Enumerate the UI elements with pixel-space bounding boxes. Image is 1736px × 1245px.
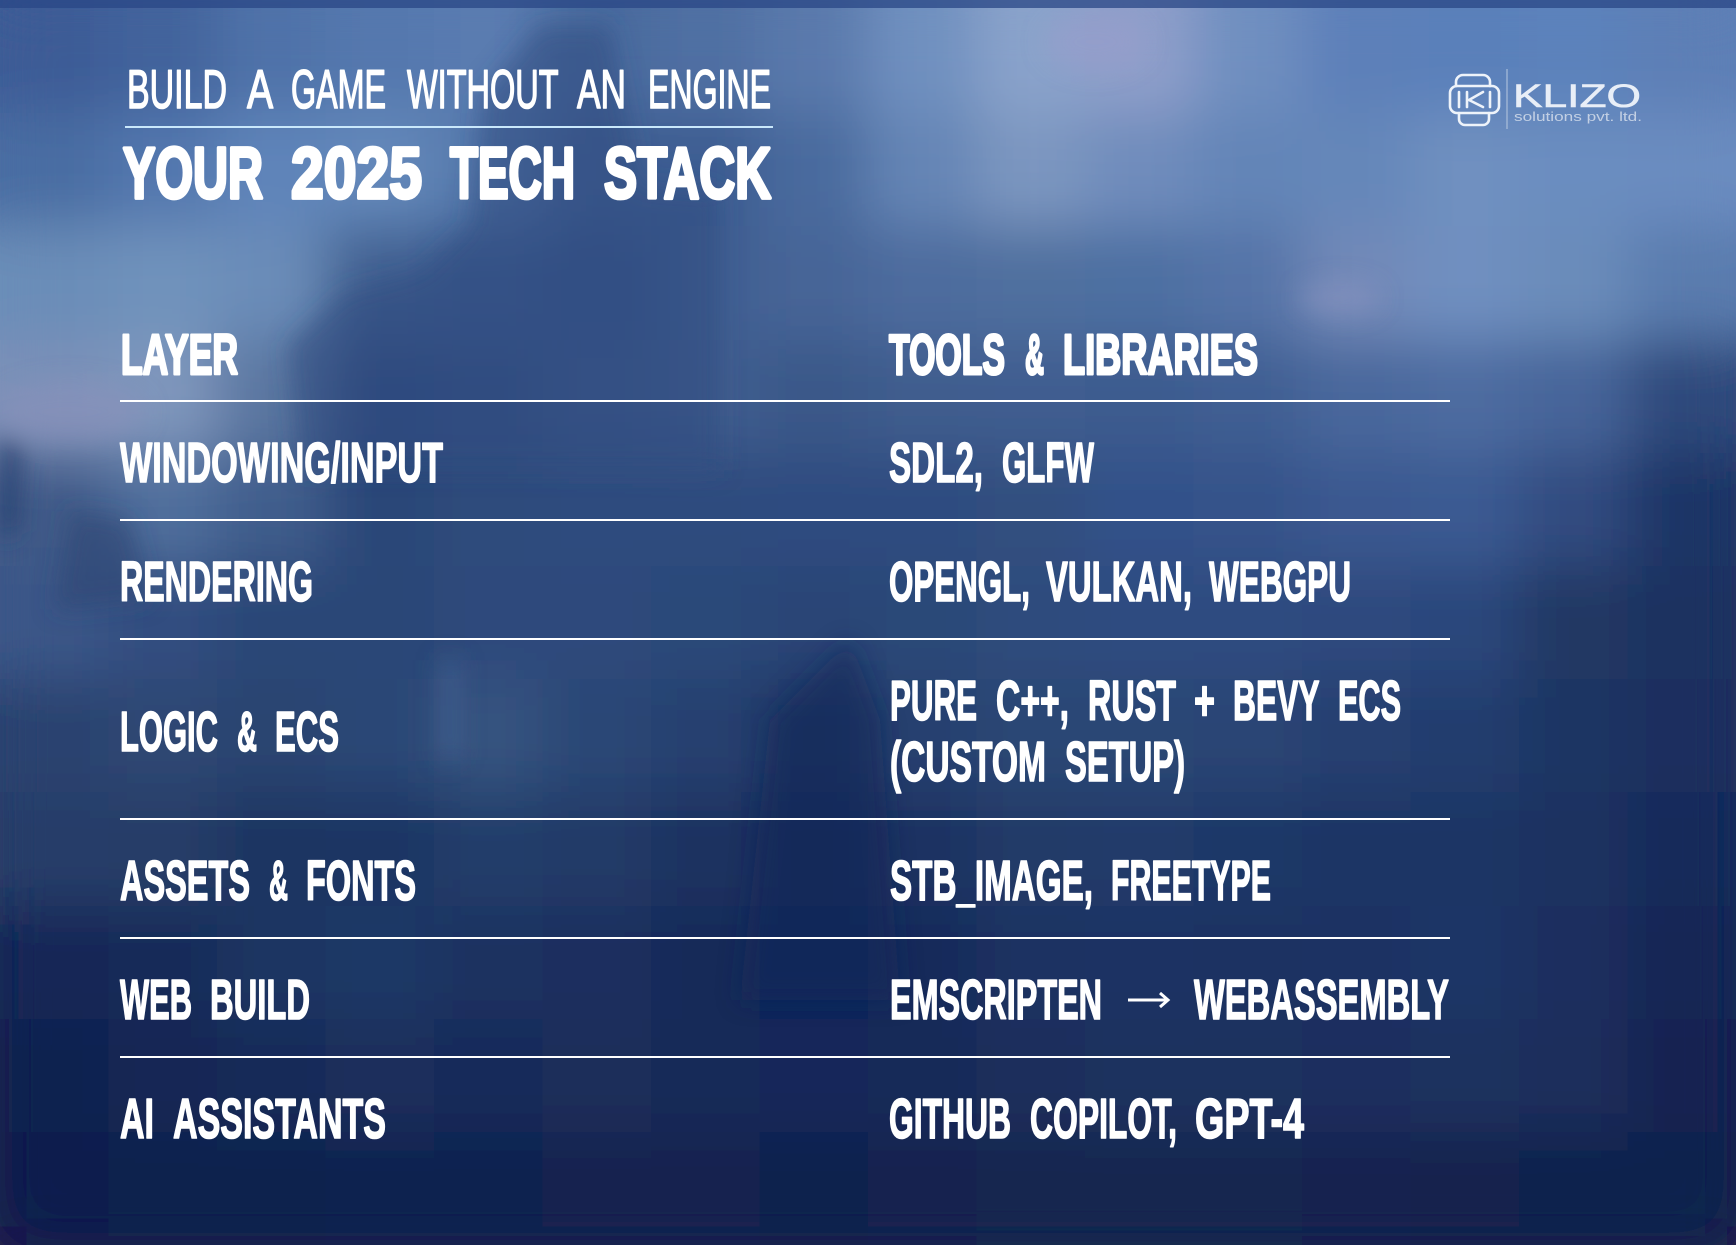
row: logic and ecs: LOGIC (120, 700, 218, 764)
row: rendering: OPENGL, (889, 550, 1030, 614)
row: ai assistants: GPT-4 (1195, 1087, 1304, 1151)
row: web build: EMSCRIPTEN (890, 968, 1102, 1032)
row: logic and ecs (120, 669, 1401, 794)
title line: build a game without an engine: WITHOUT (407, 58, 558, 120)
row: rendering: WEBGPU (1209, 550, 1351, 614)
row: windowing/input: GLFW (1002, 431, 1094, 495)
title line: build a game without an engine: AN (577, 58, 626, 120)
row: logic and ecs: ECS (1338, 669, 1401, 733)
title line: build a game without an engine: GAME (291, 58, 386, 120)
row: logic and ecs: PURE (890, 669, 977, 733)
row: rendering: VULKAN, (1046, 550, 1192, 614)
logo tagline: solutions pvt. ltd. (1514, 109, 1642, 124)
row: windowing/input: SDL2, (889, 431, 983, 495)
arrow (1128, 993, 1168, 1007)
title divider (125, 126, 773, 128)
row: ai assistants: COPILOT, (1030, 1087, 1177, 1151)
row: logic and ecs: BEVY (1233, 669, 1320, 733)
row: assets and fonts: & (269, 849, 288, 913)
title block (123, 58, 773, 214)
title line: build a game without an engine: ENGINE (648, 58, 771, 120)
title line: build a game without an engine: A (247, 58, 273, 120)
row: web build: WEBASSEMBLY (1194, 968, 1449, 1032)
row: logic and ecs: SETUP) (1065, 730, 1185, 794)
header: tools and libraries: LIBRARIES (1063, 323, 1258, 387)
row: logic and ecs: + (1194, 669, 1215, 733)
logo divider (1506, 69, 1508, 129)
row: assets and fonts: FREETYPE (1111, 849, 1271, 913)
row: web build: WEB (120, 968, 192, 1032)
row: logic and ecs: (CUSTOM (890, 730, 1046, 794)
row: web build (120, 968, 1449, 1032)
row: windowing/input (120, 431, 1094, 495)
row: assets and fonts (120, 849, 1271, 913)
title line: build a game without an engine: BUILD (127, 58, 227, 120)
row: windowing/input: WINDOWING/INPUT (120, 431, 443, 495)
logo wordmark: KLIZO (1513, 78, 1641, 114)
row: ai assistants: ASSISTANTS (173, 1087, 386, 1151)
title line: your 2025 tech stack: 2025 (291, 134, 422, 214)
row: ai assistants (120, 1087, 1304, 1151)
row: rendering: RENDERING (120, 550, 313, 614)
logo: klizo (1450, 69, 1642, 129)
logo icon (1450, 75, 1499, 125)
header: layer: LAYER (121, 323, 238, 387)
title line: your 2025 tech stack: TECH (450, 134, 575, 214)
title line: your 2025 tech stack: YOUR (123, 134, 263, 214)
row: logic and ecs: & (237, 700, 257, 764)
row: logic and ecs: ECS (275, 700, 339, 764)
row: rendering (120, 550, 1351, 614)
row: logic and ecs: C++, (996, 669, 1069, 733)
row: assets and fonts: ASSETS (120, 849, 250, 913)
row: web build: BUILD (210, 968, 310, 1032)
title line: your 2025 tech stack: STACK (604, 134, 771, 214)
row: assets and fonts: STB_IMAGE, (890, 849, 1093, 913)
row: ai assistants: AI (120, 1087, 154, 1151)
row: logic and ecs: RUST (1088, 669, 1176, 733)
header row (121, 323, 1258, 387)
header: tools and libraries: & (1025, 323, 1044, 387)
row: assets and fonts: FONTS (306, 849, 416, 913)
row: ai assistants: GITHUB (889, 1087, 1011, 1151)
header: tools and libraries: TOOLS (889, 323, 1005, 387)
tech stack table (120, 323, 1450, 1151)
